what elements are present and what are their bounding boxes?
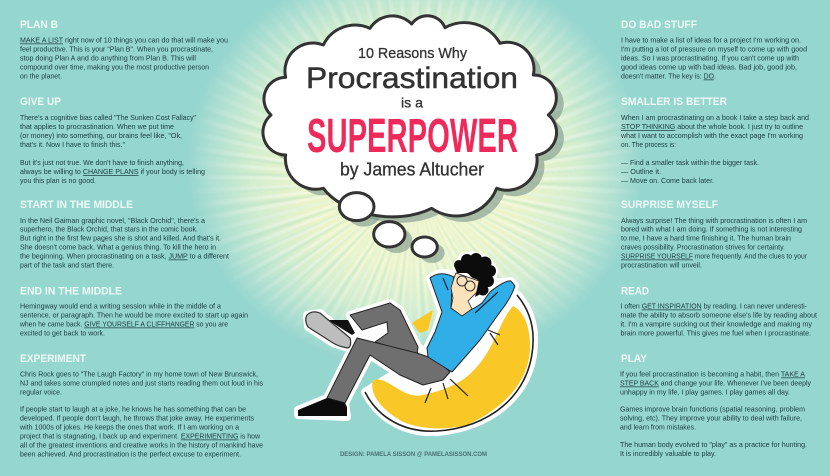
text block: experiment: Chris Rock goes to "The Laugh Factory" in my home town of New Brunswick, (20, 370, 258, 378)
text block: start in the middle (20, 216, 229, 270)
text block: experiment: all of the greatest inventions and creative works in the history of mankind have (20, 440, 263, 450)
text block: plan b: on the planet. (20, 72, 62, 80)
text block: experiment: developed. If people don't laugh, he throws that joke away. He experiments (20, 414, 254, 422)
text block: plan b: stop doing Plan A and do anything from Plan B. This will (20, 54, 196, 62)
text block: surprise myself: bored with what I am doing. If something is not interesting (621, 224, 802, 234)
title line: is a: is a (401, 94, 423, 110)
text block: do bad stuff (621, 36, 807, 80)
text block: smaller is better: — Outline it. (621, 167, 661, 176)
text block: play: It is incredibly valuable to play. (620, 449, 716, 458)
text block: smaller is better: When I am procrastinating on a book I take a step back and (621, 113, 809, 122)
text block: experiment: If people start to laugh at a joke, he knows he has something that can be (20, 404, 246, 414)
front leg (327, 338, 450, 403)
text block: play: The human body evolved to "play" as a practice for hunting. (620, 440, 807, 449)
text block: play: unhappy in my life, I play games. I play games all day. (620, 388, 790, 396)
text block: smaller is better (620, 113, 809, 185)
text block: give up: But it's just not true. We don't have to finish anything, (20, 158, 184, 167)
blue shirt (427, 274, 515, 372)
text block: give up: There's a cognitive bias called "The Sunken Cost Fallacy" (20, 113, 196, 122)
panel: surprise myself (621, 199, 808, 270)
cloud shadow (270, 22, 564, 263)
text block: experiment (19, 370, 263, 458)
title (306, 45, 518, 180)
text block: give up: that's it. Now I have to finish this." (20, 140, 125, 149)
text block: give up: always be willing to CHANGE PLANS if your body is telling (20, 167, 205, 176)
text block: give up: that applies to procrastination. When we put time (20, 122, 174, 131)
arm creases (443, 278, 498, 313)
heading: play: PLAY (621, 353, 648, 365)
cloud body (263, 16, 557, 217)
title line: 10 reasons why: 10 Reasons Why (358, 45, 467, 62)
text block: play: Games improve brain functions (spatial reasoning, problem (620, 404, 805, 414)
text block: plan b: compound over time, making you the most productive person (20, 62, 209, 72)
panel: plan b (20, 19, 228, 80)
heading: plan b: PLAN B (20, 19, 58, 31)
illustration: man on beanbag (298, 253, 534, 432)
text block: end in the middle: sentence, or paragraph. Then he would be more excited to start up again (20, 310, 248, 320)
text block: give up: (or money) into something, our brains feel like, "Ok, (20, 131, 182, 140)
panel: read (620, 286, 817, 338)
text block: surprise myself: SURPRISE YOURSELF more frequently. And the clues to your (621, 252, 808, 260)
text block: start in the middle: superhero, the Black Orchid, that stars in the comic book. (20, 224, 198, 234)
text block: start in the middle: In the Neil Gaiman graphic novel, "Black Orchid", there's a (20, 216, 205, 225)
text block: do bad stuff: doesn't matter. The key is: DO. (621, 72, 716, 80)
text block: do bad stuff: I have to make a list of ideas for a project I'm working on. (621, 36, 801, 44)
beanbag (365, 295, 533, 431)
text block: smaller is better: on. The process is: (621, 140, 676, 149)
text block: read: mate the ability to absorb someone else's life by reading about (620, 310, 817, 320)
text block: surprise myself: procrastination will unveil. (621, 260, 702, 270)
panel: experiment (19, 353, 263, 458)
text block: start in the middle: the beginning. When procrastinating on a task, JUMP to a different (20, 252, 229, 260)
text block: play: solving, etc). They improve your ability to deal with failure, (620, 414, 802, 422)
text block: smaller is better: what I want to accomplish with the exact page I'm working (620, 131, 803, 140)
panel: end in the middle (19, 286, 248, 338)
text block: end in the middle: when he came back. GIVE YOURSELF A CLIFFHANGER so you are (19, 320, 228, 328)
heading: do bad stuff: DO BAD STUFF (621, 19, 697, 31)
white sticker outline (298, 255, 534, 432)
text block: read: brain more powerful. This gives me fuel when I procrastinate. (620, 328, 811, 338)
thought cloud (263, 16, 564, 263)
text block: start in the middle: She doesn't come back. What a genius thing. To kill the hero in (20, 242, 216, 252)
text block: surprise myself: to me, I have a hard time finishing it. The human brain (621, 234, 791, 242)
heading: experiment: EXPERIMENT (20, 353, 86, 365)
text block: do bad stuff: I'm putting a lot of pressure on myself to come up with good (621, 44, 807, 54)
text block: give up: you this plan is no good. (20, 176, 96, 185)
text block: end in the middle: excited to get back to work. (20, 328, 105, 338)
text block: give up (20, 113, 205, 185)
text block: play: STEP BACK and change your life. Whenever I've been deeply (620, 378, 811, 388)
heading: start in the middle: START IN THE MIDDLE (20, 199, 133, 211)
text block: read: it. I'm a vampire sucking out their knowledge and making my (620, 320, 812, 328)
text block: smaller is better: — Find a smaller task within the bigger task. (621, 158, 759, 167)
text block: do bad stuff: ideas. So I was procrastinating. If you can't come up with (621, 54, 799, 62)
head and hair (451, 253, 496, 316)
title line: procrastination: Procrastination (306, 62, 518, 95)
text block: experiment: regular voice. (20, 388, 62, 396)
design credit: DESIGN: PAMELA SISSON @ PAMELASISSON.COM (340, 451, 487, 458)
text block: plan b: feel productive. This is your "Plan B". When you procrastinate, (20, 44, 213, 54)
text block: surprise myself: Always surprise! The thing with procrastination is often I am (621, 216, 807, 225)
text block: start in the middle: part of the task and start there. (20, 260, 114, 270)
text block: play: and learn from mistakes. (620, 422, 696, 432)
panel: smaller is better (620, 96, 809, 185)
title line: superpower: SUPERPOWER (307, 110, 518, 163)
text block: plan b: MAKE A LIST right now of 10 things you can do that will make you (20, 36, 228, 44)
thought bubbles (339, 193, 437, 257)
text block: end in the middle (19, 302, 248, 338)
text block: end in the middle: Hemingway would end a writing session while in the middle of a (20, 302, 221, 310)
panel: give up (20, 96, 205, 185)
title line: by james altucher: by James Altucher (340, 160, 484, 180)
text block: do bad stuff: good ideas come up with bad ideas. Bad job, good job, (621, 62, 797, 72)
heading: surprise myself: SURPRISE MYSELF (621, 199, 718, 211)
text block: experiment: with 1000s of jokes. He keeps the ones that work. If I am working on a (19, 422, 239, 432)
text block: smaller is better: STOP THINKING about the whole book. I just try to outline (621, 122, 803, 131)
text block: play: If you feel procrastination is becoming a habit, then TAKE A (620, 370, 805, 378)
text block: smaller is better: — Move on. Come back later. (621, 176, 714, 185)
text block: start in the middle: But right in the first few pages she is shot and killed. And that's it. (20, 234, 221, 242)
text block: experiment: been achieved. And procrastination is the perfect excuse to experiment. (20, 450, 241, 458)
heading: smaller is better: SMALLER IS BETTER (621, 96, 727, 108)
text block: surprise myself (621, 216, 808, 270)
shoe (298, 398, 347, 416)
panel: start in the middle (20, 199, 229, 270)
text block: plan b (20, 36, 228, 80)
text block: surprise myself: craves possibility. Procrastination strives for certainty. (621, 242, 785, 252)
panel: do bad stuff (621, 19, 807, 80)
text block: play (620, 370, 811, 458)
heading: read: READ (621, 286, 649, 298)
back leg and raised shoe (306, 303, 418, 355)
panel: play (620, 353, 811, 458)
heading: end in the middle: END IN THE MIDDLE (20, 286, 122, 298)
heading: give up: GIVE UP (20, 96, 61, 108)
text block: read: I often GET INSPIRATION by reading. I can never underesti- (620, 302, 808, 310)
text block: read (620, 302, 817, 338)
text block: experiment: NJ and takes some crumpled notes and just starts reading them out loud in his (20, 378, 263, 388)
text block: experiment: project that is stagnating, I back up and experiment. EXPERIMENTING is how (20, 432, 261, 440)
